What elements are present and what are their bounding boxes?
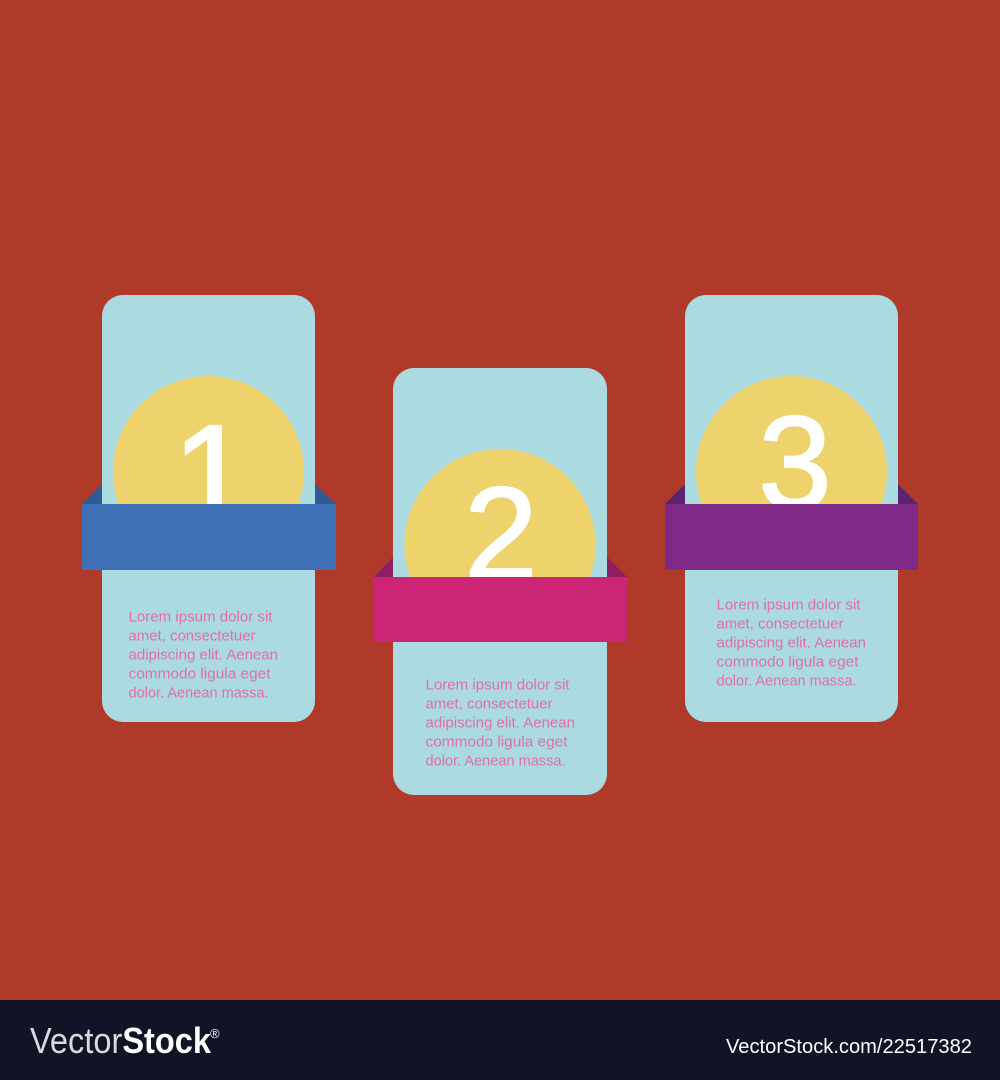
text block: step 1: adipiscing elit. Aenean xyxy=(128,646,278,664)
logo: VectorStock: VectorStock xyxy=(30,1020,212,1061)
text block: step 2: amet, consectetuer xyxy=(426,696,552,712)
text block: step 1: dolor. Aenean massa. xyxy=(128,684,268,702)
panel: step 1 xyxy=(82,295,336,722)
text block: step 1: commodo ligula eget xyxy=(128,666,271,682)
text block: step 2: commodo ligula eget xyxy=(426,734,568,750)
text block: step 2: Lorem ipsum dolor sit xyxy=(426,676,570,694)
text block: step 1: Lorem ipsum dolor sit xyxy=(128,608,273,626)
image id: VectorStock.com/22517382 xyxy=(726,1036,972,1058)
number 2: 2 xyxy=(464,460,538,607)
panel: step 2 xyxy=(374,368,627,795)
text block: step 1: amet, consectetuer xyxy=(128,628,256,644)
ribbon: step 2 xyxy=(374,577,627,642)
card: step 2 xyxy=(393,368,607,795)
text block: step 3: amet, consectetuer xyxy=(716,616,844,632)
text block: step 3: adipiscing elit. Aenean xyxy=(716,634,866,652)
card: step 1 xyxy=(102,295,315,722)
logo registered mark: ® xyxy=(210,1026,220,1041)
ribbon fold: step 3 xyxy=(665,484,918,504)
circle: step 3 xyxy=(696,376,887,567)
panel: step 3 xyxy=(665,295,918,722)
ribbon: step 1 xyxy=(82,504,336,570)
footer bar xyxy=(0,1000,1000,1080)
ribbon fold: step 2 xyxy=(374,557,627,577)
text block: step 2: adipiscing elit. Aenean xyxy=(426,714,575,732)
ribbon: step 3 xyxy=(665,504,918,570)
number 3: 3 xyxy=(758,389,832,536)
circle: step 1 xyxy=(113,376,304,567)
text block: step 3: commodo ligula eget xyxy=(716,654,859,670)
text block: step 2: dolor. Aenean massa. xyxy=(426,752,566,770)
number 1: 1 xyxy=(172,395,252,556)
card: step 3 xyxy=(685,295,898,722)
text block: step 3: Lorem ipsum dolor sit xyxy=(716,596,861,614)
ribbon fold: step 1 xyxy=(82,484,336,504)
circle: step 2 xyxy=(404,449,596,640)
text block: step 3: dolor. Aenean massa. xyxy=(716,672,856,690)
